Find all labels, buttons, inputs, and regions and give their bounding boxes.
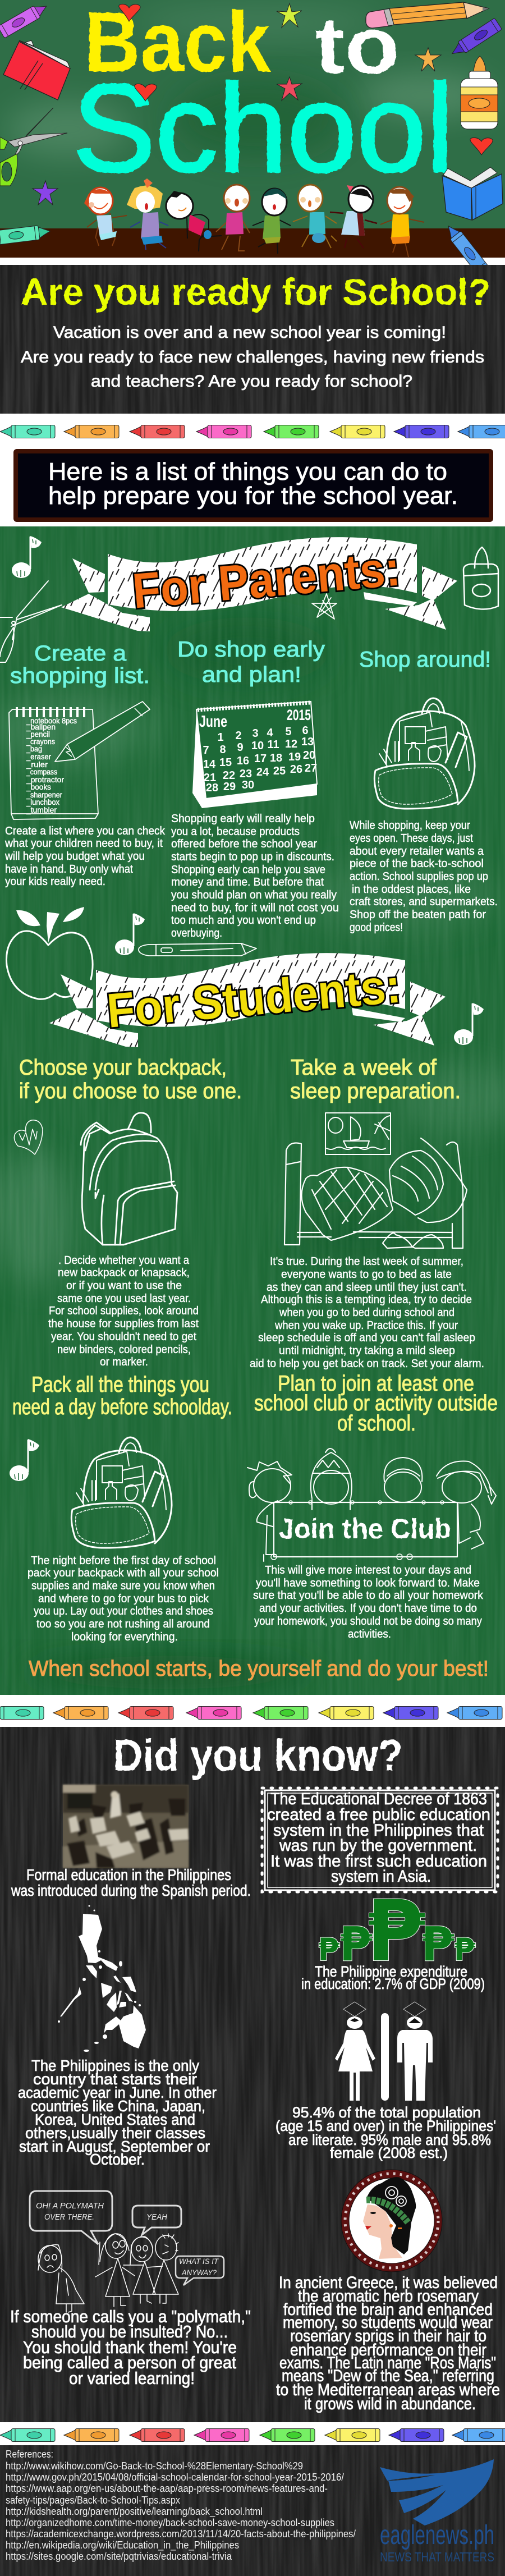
panel: list intro blackboard [0,449,505,526]
icon: shopping list notebook [9,702,150,819]
intro sentence: help prepare you for the school year. [48,482,458,510]
icon: glue bottle [461,56,498,129]
icon: June 2015 calendar: 21 [204,772,216,784]
icon: shopping list notebook: _bag [26,744,42,753]
speech bubble 2 [132,2206,181,2235]
icon: apple [6,907,93,999]
text: rosemary: it grows wild in abundance. [304,2395,476,2413]
text: sleep preparation: aid to help you get back on track. Set your alarm. [250,1358,484,1370]
text: shop early: offered before the school year [171,838,317,850]
references list [6,2449,356,2562]
icon: shopping list notebook: _lunchbox [26,797,59,806]
icon: shopping list notebook: _sharpener [26,790,62,799]
intro text: Are you ready to face new challenges, having new friends [21,348,484,366]
text: shop around: piece of the back-to-school [350,858,484,870]
text: rosemary [276,2274,500,2413]
icon: blue crayon [443,222,488,274]
speech bubble 3: WHAT IS IT [179,2257,219,2266]
text: join a club: This will give more interest to your days and [265,1564,471,1576]
text: literacy: 95.4% of the total population [292,2104,481,2121]
icon: peso signs: ₱ [421,1917,454,1972]
heading: did you know: Did you know? [113,1730,403,1780]
text: create a list: Create a list where you can check [5,825,166,837]
text: academic year in June: others,usually their classes [25,2124,205,2142]
headings: parents tips: shopping list. [10,664,150,688]
headings: students tips 1 [19,1056,461,1103]
icon: June 2015 calendar: 2015 [287,707,311,723]
text: shop around: Shop off the beaten path for [350,909,486,921]
icon: June 2015 calendar: 6 [302,725,309,737]
icon: June 2015 calendar: 25 [273,765,286,777]
text: shop early: Shopping early can help you save [171,864,325,876]
text: pack the night before: and where to go for your bus to pick [38,1593,209,1605]
headings: parents tips: Create a [34,641,126,666]
icon: June 2015 calendar: 23 [240,768,252,780]
icon: shopping list notebook: _crayons [26,737,55,746]
headings: students tips 1: if you choose to use one. [19,1079,242,1103]
icon: June 2015 calendar: 9 [237,741,244,754]
text: join a club: and your activities. If you don't have time to do [259,1602,477,1615]
heading: are you ready for school: Are you ready for School? [21,271,491,313]
text: choose backpack: For school supplies, look around [49,1305,199,1317]
icon: June 2015 calendar: 5 [285,726,292,738]
text: choose backpack: . Decide whether you want a [58,1254,190,1267]
icon: heart doodle [14,1120,43,1154]
text: academic year in June [18,2057,217,2168]
text: choose backpack: or if you want to use the [66,1280,182,1292]
text: polymath: If someone calls you a "polymath," [10,2307,251,2326]
text: sleep preparation: when you wake up. Practice this. If your [274,1319,458,1332]
stick figures [38,2234,178,2312]
panel: educational decree callout [262,1788,498,1892]
icons: hearts [119,4,493,155]
panel: references footer [0,2445,505,2576]
panel: educational decree callout: system in the Philippines that [273,1821,484,1840]
headings: students tips 2: Plan to join at least one [278,1372,474,1396]
text: pack the night before: The night before the first day of school [31,1555,216,1567]
headings: students tips 1: Choose your backpack, [19,1056,227,1080]
illustration: polymath cartoon [30,2191,224,2312]
crayon strip 2 [0,1695,505,1727]
icon: join the club children with sign [247,1449,496,1561]
heading: for students: For Students: [105,959,403,1038]
references list: http://www.wikihow.com/Go-Back-to-School-%28Elementary-School%29 [6,2460,303,2472]
icon: empty backpack [81,1113,177,1245]
icon: peso signs: ₱ [318,1932,340,1968]
icon: June 2015 calendar: 4 [267,727,273,739]
icon: music note right [454,1003,484,1045]
icon: music note [115,913,145,955]
panel: educational decree callout: created a free public education [267,1805,490,1824]
text: choose backpack: new backpack or knapsack, [58,1267,190,1279]
text: polymath [10,2307,251,2388]
references list: http://kidshealth.org/parent/positive/learning/back_school.html [6,2506,263,2518]
text: polymath: You should thank them! You're [23,2337,237,2357]
text: join a club: sure that you'll be able to do all your homework [253,1589,484,1602]
intro sentence [48,458,458,510]
text: shop around: in the oddest places, like [352,883,471,896]
text: create a list: your kids really need. [5,876,105,888]
speech bubble 1: OH! A POLYMATH [36,2201,104,2211]
icon: music note top [12,536,42,578]
icon: June 2015 calendar: 16 [237,755,249,767]
icons: stars [33,3,441,205]
icon: shopping list notebook: _compass [26,767,57,776]
text: polymath: should you be insulted? No... [31,2322,228,2341]
icon: picture frame [325,1113,391,1154]
text: shop early: need to buy, for it will not cost you [171,902,339,914]
text: shop early: money and time. But before that [171,876,324,888]
intro text: Vacation is over and a new school year is coming! [53,323,446,342]
icon: red book [3,40,70,100]
panel: green chalkboard [0,526,505,1695]
icon: music note left [10,1439,39,1481]
references list: http://www.gov.ph/2015/04/08/official-school-calendar-for-school-year-2015-2016/ [6,2472,344,2483]
headings: students tips 2: Pack all the things you [31,1373,209,1397]
text: shop around: good prices! [350,922,403,934]
references list: https://www.aap.org/en-us/about-the-aap/aap-press-room/news-features-and- [6,2483,328,2494]
headings: parents tips: Shop around! [359,648,491,672]
text: expenditure [301,1963,485,1992]
icon: June 2015 calendar: 8 [219,744,226,756]
icon: June 2015 calendar: 30 [242,779,254,791]
text: sleep preparation [250,1255,484,1370]
icon: scissors [0,108,67,186]
child 5 [252,189,291,254]
text: create a list: have in hand. Buy only what [5,863,133,876]
text: sleep preparation: sleep schedule is off and you can't fall asleep [258,1332,475,1344]
icon: shopping list notebook: _tumbler [26,805,57,814]
text: join a club [253,1564,484,1640]
photo: classroom in the Spanish period [63,1785,189,1868]
icon: June 2015 calendar: 18 [270,752,282,764]
text: choose backpack: year. You shouldn't need to get [51,1331,196,1343]
icon: shopping list notebook: _protractor [26,775,64,784]
references list: http://organizedhome.com/time-money/back-school-save-money-school-supplies [6,2517,334,2528]
speech bubble 1 [30,2191,112,2244]
text: create a list [4,825,166,888]
closing message: When school starts, be yourself and do your best! [29,1657,489,1681]
panel: are you ready [0,265,505,414]
headings: students tips 1: Take a week of [291,1056,437,1080]
text: sleep preparation: It's true. During the last week of summer, [270,1255,463,1268]
icon: glue outline [463,547,498,609]
text: polymath: or varied learning! [69,2368,195,2388]
references list: https://sites.google.com/site/pqtrivias/educational-trivia [6,2551,232,2562]
text: pack the night before: pack your backpack with all your school [27,1567,219,1579]
text: sleep preparation: everyone wants to go to bed as late [281,1268,452,1281]
headings: students tips 2 [12,1372,498,1436]
text: academic year in June: start in August, September or [19,2138,210,2155]
icon: June 2015 calendar: 12 [285,738,297,750]
text: shop early: you a lot, because products [171,826,300,838]
text: shop around: craft stores, and supermarkets. [350,896,498,908]
icon: small pencil [139,943,256,956]
icon: June 2015 calendar: 2 [235,730,242,742]
icon: June 2015 calendar: 7 [203,744,209,757]
title: Back to School: to [315,1,400,90]
icon: graduate woman and man [335,2002,433,2101]
references list: https://academicexchange.wordpress.com/2013/11/14/20-facts-about-the-philippines/ [6,2528,356,2540]
text: academic year in June: Korea, United States and [35,2111,195,2128]
speech bubble 2: YEAH [146,2212,167,2222]
text: choose backpack: same one you used last year. [57,1292,191,1305]
icon: June 2015 calendar: 13 [301,736,314,748]
panel: header chalkboard [0,0,505,274]
text: choose backpack [48,1254,199,1368]
intro text: and teachers? Are you ready for school? [91,372,412,391]
text: choose backpack: the house for supplies from last [48,1318,199,1330]
icon: shopping list notebook: _ruler [26,760,48,769]
child 8 [380,187,424,257]
icon: Philippines map [58,1905,146,2052]
child 7 [330,185,377,248]
text: shop around [350,819,498,934]
headings: students tips 1: sleep preparation. [290,1079,461,1103]
panel: educational decree callout: The Educational Decree of 1863 [270,1790,487,1808]
icon: June 2015 calendar: June [199,713,227,731]
child 1 [84,187,127,246]
sign text: Join the Club [279,1513,451,1544]
icon: June 2015 calendar: 26 [290,763,302,776]
text: formal education [11,1866,251,1899]
icon: shopping list notebook: _pencil [26,730,50,739]
text: pack the night before: looking for everything. [71,1631,178,1643]
icon: child sleeping in bed [284,1138,467,1248]
text: choose backpack: new binders, colored pencils, [57,1344,191,1356]
text: shop early: starts begin to pop up in discounts. [171,851,334,863]
icon: June 2015 calendar: 22 [223,769,235,782]
icon: June 2015 calendar: 3 [252,727,259,740]
icon: June 2015 calendar: 27 [305,762,317,774]
text: academic year in June: October. [90,2151,145,2168]
text: join a club: activities. [348,1628,391,1640]
text: polymath: being called a person of great [23,2353,236,2372]
text: rosemary: the aromatic herb rosemary [298,2287,479,2305]
icon: full backpack [374,698,475,809]
speech bubble 3 [176,2256,224,2285]
icon: June 2015 calendar: 15 [219,757,232,769]
text: literacy: female (2008 est.) [330,2144,448,2161]
speech bubble 1: OVER THERE. [44,2212,94,2222]
icon: June 2015 calendar: 14 [203,758,216,771]
text: expenditure: The Philippine expenditure [315,1963,467,1980]
text: shop early: you should plan on what you really [171,889,337,901]
text: pack the night before: you up. Lay out your clothes and shoes [34,1605,213,1617]
text: sleep preparation: as they can and sleep until they just can't. [267,1281,467,1294]
text: shop around: about every retailer wants a [350,845,484,858]
headings: students tips 2: of school. [337,1411,416,1436]
icon: June 2015 calendar: 24 [256,766,269,778]
crayon strip 3 [0,2422,505,2445]
text: sleep preparation: until midnight, try taking a mild sleep [279,1345,455,1357]
text: academic year in June: academic year in June. In other [18,2084,217,2101]
child 3 [166,191,222,251]
illustration: group of children [84,178,424,257]
icon: scissors outline [0,581,62,662]
icon: peso signs: ₱ [366,1883,425,1981]
logo: eaglenews.ph [380,2459,494,2564]
icon: June 2015 calendar: 17 [254,753,267,765]
text: pack the night before: supplies and make sure you know when [31,1580,215,1592]
icon: shopping list notebook: _books [26,782,51,791]
banner: for parents [61,537,457,631]
icon: June 2015 calendar: 28 [206,782,218,794]
icon: teal crayon [0,224,51,245]
intro text [21,323,484,391]
icon: June 2015 calendar: 20 [303,749,315,762]
title: Back to School: School [72,59,454,198]
intro sentence: Here is a list of things you can do to [48,458,447,485]
text: sleep preparation: when you go to bed during school and [279,1307,454,1319]
text: create a list: will help you budget what you [4,850,145,863]
speech bubble 3: ANYWAY? [181,2268,217,2277]
text: formal education: was introduced during the Spanish period. [11,1882,251,1899]
text: academic year in June: countries like China, Japan, [31,2097,205,2115]
text: shop early [171,813,339,939]
icon: purple crayon [0,1,50,38]
child 6 [293,185,337,248]
icon: pencil [366,2,489,28]
text: pack the night before [27,1555,219,1643]
text: join a club: you'll have something to look forward to. Make [256,1577,480,1589]
icon: blue book [442,167,503,220]
child 2 [127,178,168,250]
icon: Greek woman medallion [341,2170,442,2272]
icon: peso signs: ₱ [339,1917,373,1972]
text: pack the night before: too so you are not rushing all around [36,1618,210,1630]
text: shop early: overbuying. [171,927,222,939]
headings: parents tips: and plan! [202,663,301,687]
text: create a list: what your children need to buy, it [4,837,163,850]
icon: June 2015 calendar: 10 [251,740,264,752]
text: formal education: Formal education in the Philippines [26,1866,231,1883]
banner: for students [49,953,446,1047]
headings: parents tips [10,638,491,688]
icon: June 2015 calendar: 11 [267,739,279,751]
text: shop early: Shopping early will really help [171,813,315,825]
icon: peso signs [318,1883,476,1981]
references list: References: [6,2449,53,2460]
panel: educational decree callout: was run by the government. [279,1836,477,1855]
panel: educational decree callout: It was the first such education [270,1852,487,1871]
text: academic year in June: country that starts their [33,2070,197,2088]
icon: June 2015 calendar: 19 [288,751,301,763]
references list: http://en.wikipedia.org/wiki/Education_in_the_Philippines [6,2540,239,2551]
icon: shopping list notebook: _eraser [26,752,51,761]
text: shop around: action. School supplies pop up [350,870,488,883]
icon: star doodle [312,594,337,619]
headings: students tips 2: need a day before schoolday. [12,1395,232,1419]
crayon strip 1 [0,414,505,449]
icon: June 2015 calendar [192,702,317,808]
text: shop early: too much and you won't end up [171,914,316,927]
icon: shopping list notebook: _notebook 8pcs [26,716,77,725]
icon: June 2015 calendar: 1 [217,731,224,744]
icon: June 2015 calendar: 29 [223,781,236,793]
text: choose backpack: or marker. [100,1356,148,1368]
text: literacy [276,2104,496,2161]
text: shop around: While shopping, keep your [350,819,470,832]
icon: peso signs: ₱ [454,1932,476,1968]
text: shop around: eyes open. These days, just [350,832,473,845]
child 4 [216,185,250,251]
heading: for parents: For Parents: [130,540,402,619]
text: academic year in June: The Philippines is the only [31,2057,199,2074]
text: sleep preparation: Although this is a tempting idea, try to decide [261,1294,472,1306]
headings: parents tips: Do shop early [177,638,325,662]
icon: shopping list notebook: _ballpen [26,722,56,731]
text: join a club: your homework, you should not be doing so many [254,1615,482,1628]
panel: did you know [0,1727,505,2422]
icon: full backpack students [71,1437,172,1548]
references list: safety-tips/pages/Back-to-School-Tips.aspx [6,2495,180,2506]
floor strip [0,228,505,258]
panel: educational decree callout: system in Asia. [331,1867,431,1886]
icon: indigo crayon [448,18,502,59]
